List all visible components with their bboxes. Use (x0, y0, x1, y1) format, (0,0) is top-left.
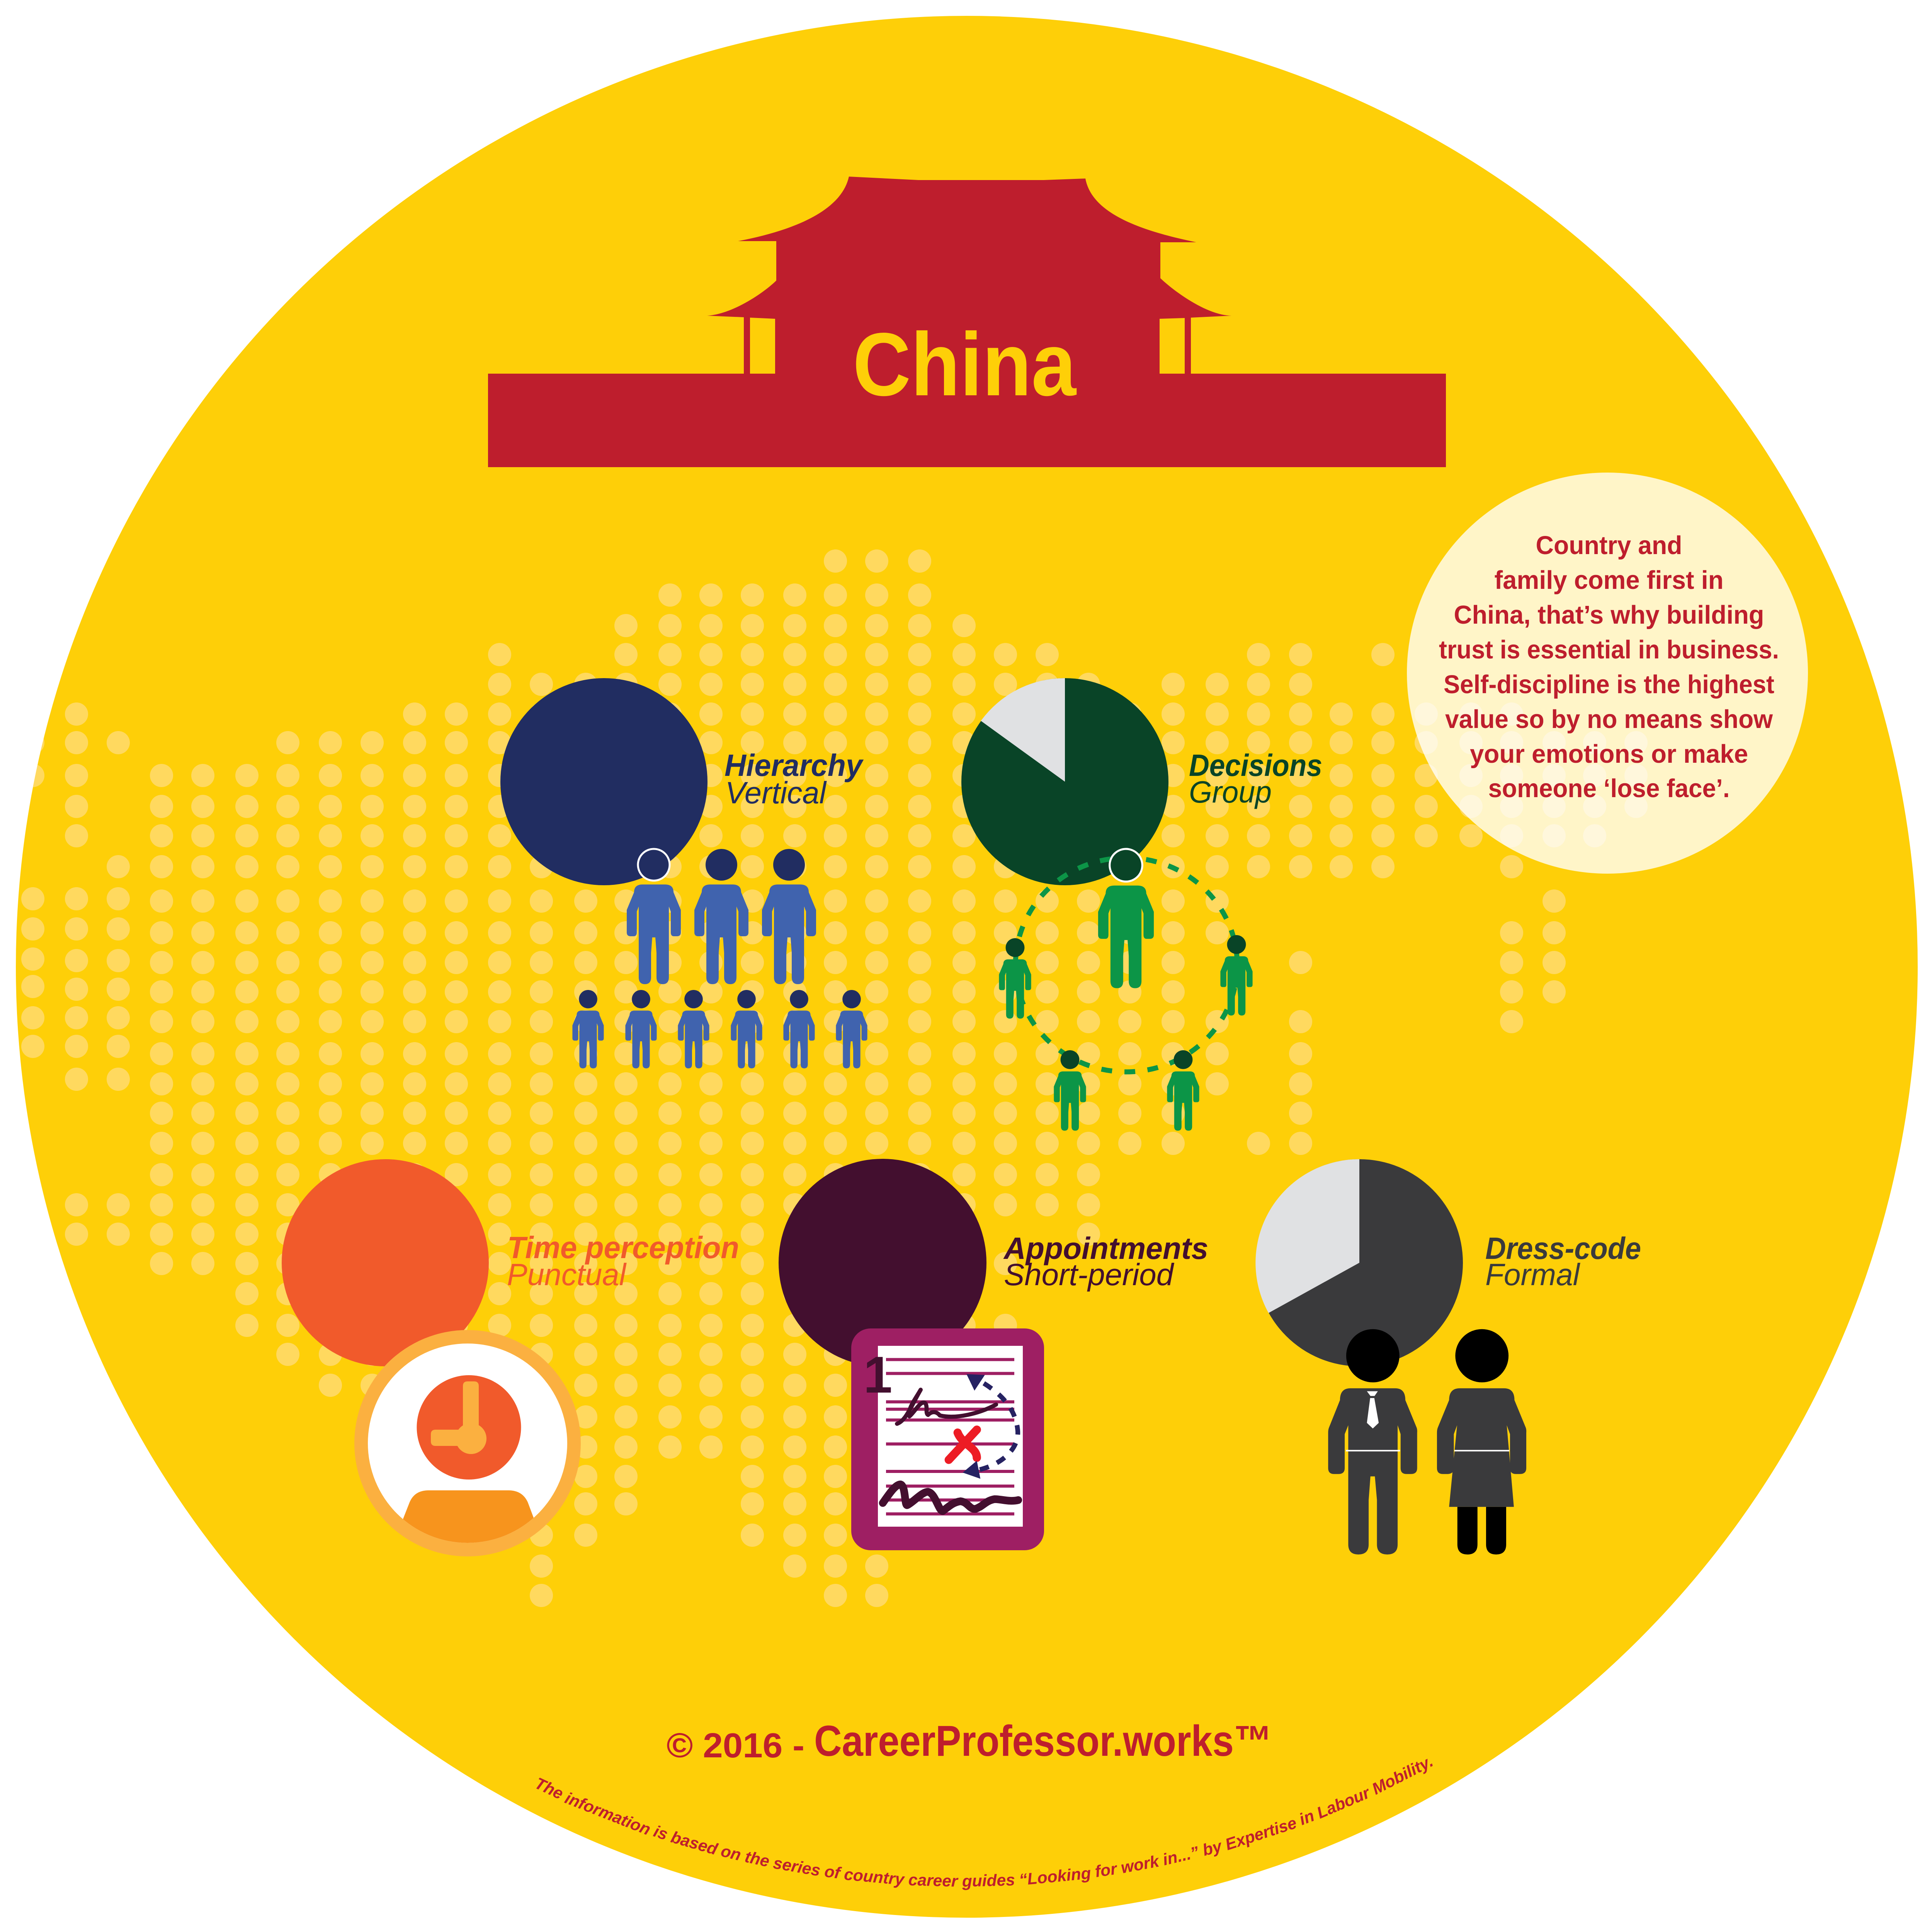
dress code value: Formal (1485, 1257, 1580, 1292)
icon: rescheduled agenda tablet (851, 1328, 1044, 1550)
curved source note: of (823, 1862, 843, 1883)
time perception value: Punctual (507, 1257, 627, 1292)
hierarchy value: Vertical (725, 776, 827, 810)
curved source note (532, 1752, 1436, 1891)
icon: group circle of people (999, 849, 1253, 1131)
hierarchy pie (500, 678, 707, 885)
curved source note: work (1119, 1852, 1162, 1877)
appointments value: Short-period (1004, 1257, 1175, 1292)
hierarchy heading: Hierarchy (724, 748, 864, 782)
decisions heading: Decisions (1189, 748, 1322, 782)
icon: man in suit (1328, 1329, 1417, 1554)
curved source note: Expertise (1223, 1814, 1299, 1854)
curved source note: the (743, 1848, 771, 1871)
callout text: value so by no means show (1445, 705, 1773, 734)
bubble background (1407, 473, 1808, 874)
icon: rescheduled agenda tablet: 1 (864, 1346, 892, 1404)
callout text: trust is essential in business. (1439, 635, 1779, 664)
header: temple with title (488, 177, 1446, 467)
curved source note: by (1201, 1837, 1225, 1860)
appointments pie (779, 1159, 986, 1367)
icon: clock head person (354, 1330, 581, 1556)
icon: three managers and six staff (572, 849, 867, 1068)
footer copyright: CareerProfessor.works™ (814, 1717, 1272, 1765)
icon: red temple silhouette (488, 177, 1446, 467)
curved source note: The (532, 1774, 566, 1803)
time perception pie (282, 1159, 489, 1366)
icon: woman in skirt (1437, 1329, 1526, 1554)
curved source note: Labour (1314, 1783, 1373, 1822)
panel: decisions (961, 678, 1322, 1131)
curved source note: is (651, 1822, 670, 1844)
callout bubble (1407, 473, 1808, 874)
dotted world map background (33, 561, 1636, 1595)
decisions value: Group (1189, 775, 1272, 809)
curved source note: guides (961, 1871, 1015, 1891)
time perception heading: Time perception (507, 1230, 739, 1265)
panel: appointments (779, 1159, 1208, 1550)
curved source note: information (562, 1789, 653, 1839)
curved source note: country (843, 1866, 906, 1889)
curved source note: in...” (1161, 1843, 1201, 1869)
curved source note: Mobility. (1369, 1752, 1436, 1798)
curved source note: series (772, 1854, 822, 1880)
callout text: your emotions or make (1470, 740, 1748, 769)
callout text: China, that’s why building (1454, 600, 1764, 629)
curved source note: career (908, 1871, 959, 1891)
callout text: family come first in (1495, 566, 1723, 595)
panel: dress code (1255, 1159, 1641, 1554)
callout text: someone ‘lose face’. (1488, 774, 1730, 803)
curved source note: “Looking (1018, 1864, 1092, 1889)
decisions pie (961, 678, 1168, 885)
callout text: Country and (1536, 531, 1682, 560)
footer copyright: © 2016 - (667, 1726, 804, 1765)
footer copyright (667, 1717, 1272, 1765)
appointments heading: Appointments (1003, 1231, 1208, 1265)
curved source note: in (1297, 1807, 1317, 1829)
panel: hierarchy (500, 678, 867, 1068)
curved source note: on (719, 1842, 743, 1864)
curved source note: based (669, 1828, 720, 1859)
curved source note: for (1094, 1860, 1119, 1881)
callout text (1439, 531, 1779, 803)
dress code heading: Dress-code (1485, 1231, 1641, 1265)
title: China (853, 315, 1077, 415)
panel: time perception (282, 1159, 739, 1556)
dress code pie (1255, 1159, 1463, 1366)
callout text: Self-discipline is the highest (1444, 670, 1774, 699)
